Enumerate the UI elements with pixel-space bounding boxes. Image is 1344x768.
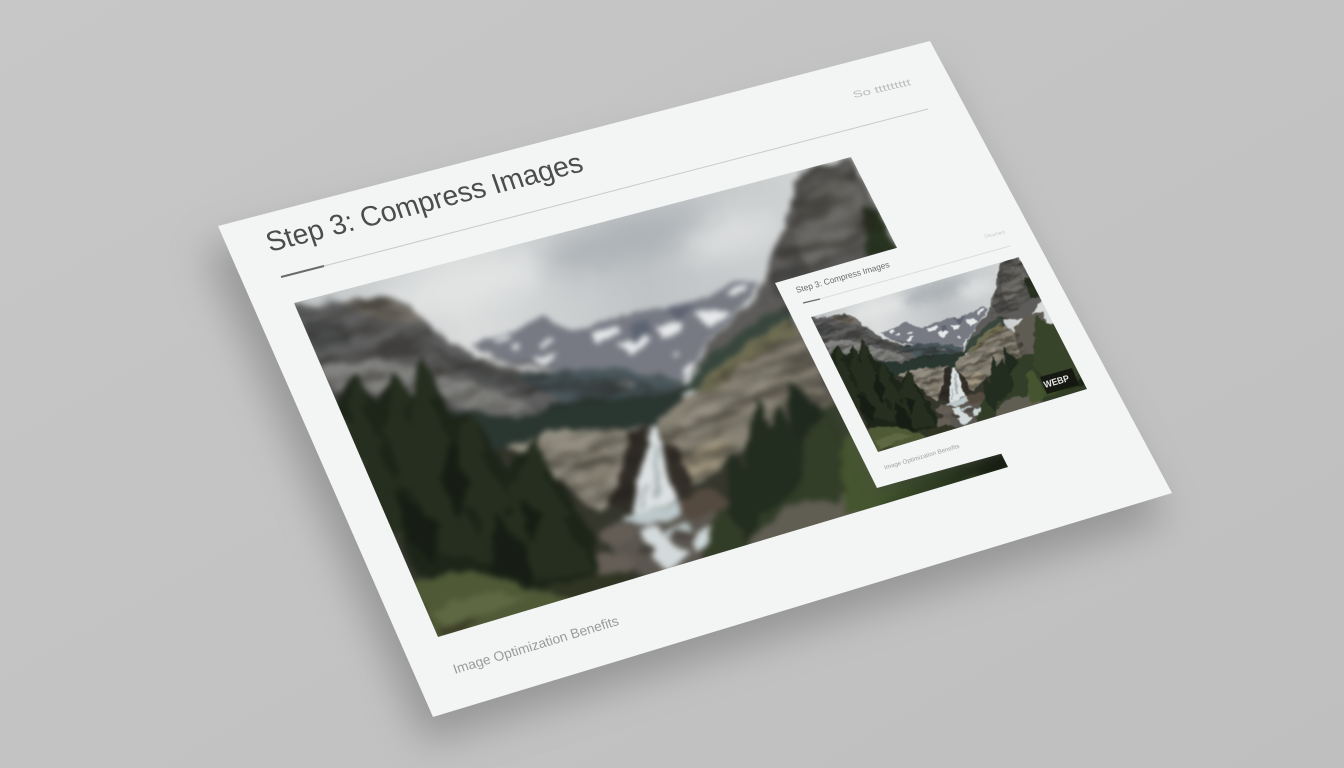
- inset card shadow: [804, 344, 1002, 487]
- page shadow: [205, 70, 1165, 742]
- inset caption: Image Optimization Benefits: [884, 444, 961, 471]
- accent underline: [281, 266, 324, 277]
- header rule: [324, 109, 928, 266]
- inset card top label: Document: [984, 229, 1007, 240]
- mockup scene: [201, 41, 1176, 754]
- top-right label: So ttttttttt: [851, 77, 913, 101]
- heading: step title: Step 3: Compress Images: [262, 147, 587, 259]
- inset photo: sharper mountain waterfall: [811, 257, 1087, 452]
- main photo: blurred mountain waterfall: [294, 157, 1008, 637]
- inset header rule: [820, 246, 1010, 299]
- badge: WEBP: [1040, 368, 1079, 394]
- inset accent underline: [803, 299, 820, 303]
- caption: Image Optimization Benefits: [451, 613, 621, 677]
- page sheet: [180, 0, 1172, 717]
- badge: WEBP: WEBP: [1042, 373, 1071, 391]
- inset card: [775, 230, 1087, 488]
- inset card title: Step 3: Compress Images: [794, 259, 891, 295]
